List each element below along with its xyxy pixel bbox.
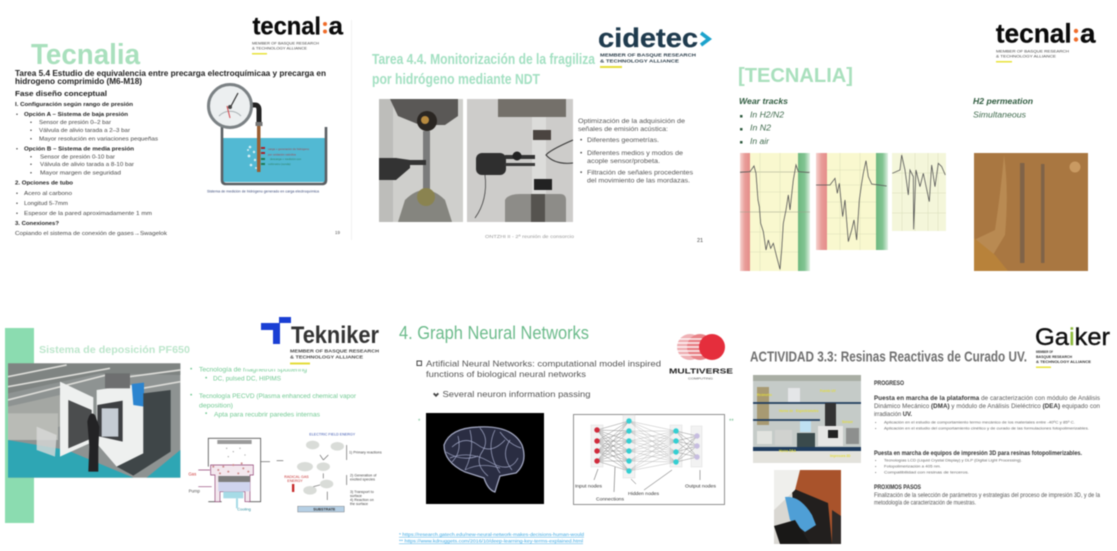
text block: wear tracks: Wear tracks [739, 97, 789, 106]
text block: wear tracks: In H2/N2 [750, 110, 785, 120]
footer: 21 [697, 238, 703, 244]
subheading: fase diseño conceptual: Fase diseño conceptual [15, 89, 107, 98]
text block: próximos pasos: metodología de caracterización de muestras. [874, 500, 976, 506]
logo: tecnalia: & TECHNOLOGY ALLIANCE [252, 46, 308, 50]
text block: optimización: Optimización de la adquisición de [578, 118, 685, 125]
diagram: neural network: Output nodes [685, 484, 716, 488]
text block: optimización: • [580, 137, 583, 144]
diagram: plasma reaction flow: 4) Reaction on [350, 498, 374, 502]
logo: tecnalia: a [328, 12, 344, 40]
text block: configuration list: • [30, 128, 32, 134]
text block: progreso: • [875, 426, 877, 430]
text block: configuration list: • [16, 112, 18, 118]
diagram: plasma reaction flow: 3) Transport to [350, 490, 374, 494]
chart: wear track H2/N2 [740, 153, 810, 271]
text block: configuration list: Válvula de alivio tarada a 8-10 bar [40, 162, 134, 168]
heading: tarea 4.4: por hidrógeno mediante NDT [372, 72, 540, 88]
text block: artificial neural networks: Artificial Neural Networks: computational model inspired [426, 358, 661, 368]
text block: artificial neural networks: functions of biological neural networks [426, 369, 586, 379]
text block: wear tracks: In N2 [750, 124, 772, 132]
text block: progreso: Puesta en marcha de la plataforma de caracterización con módulo de Análisis [874, 395, 1100, 402]
photo: gloved hand with 3D printer [774, 470, 841, 544]
references: links: ** https://www.kdnuggets.com/2016/10/deep-learning-key-terms-explained.html [399, 538, 583, 544]
diagram: PECVD chamber [188, 438, 283, 511]
text block: technologies: Tecnología PECVD (Plasma enhanced chemical vapor [199, 393, 357, 400]
photo: H2 permeation micrograph [974, 153, 1088, 271]
diagram: neural network: Input nodes [575, 484, 602, 488]
heading: tarea 5.4 [15, 68, 326, 86]
text block: configuration list: Opción A – Sistema de baja presión [24, 112, 129, 118]
text block: optimización: del movimiento de las mordazas. [587, 178, 690, 184]
text block: impresión 3D [874, 450, 1082, 474]
text block: optimización: Diferentes geometrías. [587, 137, 659, 144]
text block: impresión 3D: • [875, 470, 877, 474]
diagram: pressure gauge and electrochemical cell: descarga + medición con [270, 157, 302, 161]
diagram: PECVD chamber: Cooling [237, 506, 251, 511]
text block: configuration list [15, 102, 341, 237]
heading: graph neural networks: 4. Graph Neural Networks [399, 322, 589, 343]
text block: progreso [874, 380, 1101, 430]
panel: Tecnalia wear tracks [738, 18, 1096, 271]
logo: cidetec: & TECHNOLOGY ALLIANCE [600, 58, 679, 64]
text block: configuration list: • [16, 191, 18, 197]
logo: multiverse: MULTIVERSE [669, 366, 733, 376]
text block: H2 permeation: Simultaneous [973, 110, 1026, 120]
text block: configuration list: • [30, 170, 32, 176]
diagram: plasma reaction flow: ELECTRIC FIELD ENERGY [309, 432, 356, 436]
diagram: neural network: ** [729, 419, 734, 425]
diagram: pressure gauge and electrochemical cell: carga + generación de hidrógeno [268, 147, 310, 151]
heading: sistema de deposición: Sistema de deposición PF650 [39, 345, 190, 356]
photo: specimen left [379, 99, 463, 222]
photo: laboratory bench: Horno de [779, 409, 793, 413]
text block: progreso: irradiación UV. [874, 411, 912, 418]
text block: configuration list: • [30, 154, 32, 160]
diagram: plasma reaction flow: ENERGY [287, 479, 303, 483]
text block: wear tracks [739, 97, 789, 146]
logo: tecnalia: MEMBER OF BASQUE RESEARCH [252, 42, 320, 46]
text block: H2 permeation: H2 permeation [973, 97, 1033, 106]
text block: technologies [190, 366, 357, 418]
photo: laboratory bench: Horno DEA [779, 449, 797, 453]
photo: laboratory bench: Impresora 3D [830, 454, 851, 458]
text block: technologies: • [190, 366, 193, 373]
logo: tecnalia: MEMBER OF BASQUE RESEARCH [996, 50, 1070, 54]
photo: laboratory bench: Fuente UV [820, 389, 837, 393]
text block: impresión 3D: Puesta en marcha de equipos de impresión 3D para resinas fotopolimerizables. [874, 450, 1082, 457]
text block: optimización [578, 118, 694, 184]
logo: tekniker [200, 312, 384, 369]
logo: tekniker: MEMBER OF BASQUE RESEARCH [290, 348, 380, 354]
text block: impresión 3D: Compatibilidad con resinas de terceros. [884, 470, 969, 474]
heading: tarea 5.4: Tarea 5.4 Estudio de equivalencia entre precarga electroquímicaa y precarga en [15, 68, 326, 78]
text block: configuration list: • [16, 146, 18, 152]
diagram: plasma reaction flow [284, 432, 382, 512]
text block: H2 permeation [973, 97, 1033, 120]
chart: wear track air [892, 153, 946, 231]
text block: progreso: Dinámico Mecánico (DMA) y módulo de Análisis Dieléctrico (DEA) equipado con [874, 403, 1101, 410]
text block: technologies: Tecnología de magnetron sputtering [199, 366, 307, 374]
diagram: plasma reaction flow: 1) Primary reactions [349, 450, 382, 454]
text block: technologies: • [190, 392, 193, 399]
references: links [399, 532, 585, 544]
text block: optimización: Filtración de señales procedentes [587, 170, 694, 176]
text block: configuration list: Copiando el sistema de conexión de gases→Swagelok [15, 231, 167, 237]
text block: configuration list: Válvula de alivio tarada a 2–3 bar [39, 128, 130, 134]
text block: próximos pasos [874, 484, 1100, 506]
text block: configuration list: • [16, 211, 18, 217]
logo: tecnalia: & TECHNOLOGY ALLIANCE [996, 54, 1057, 58]
chart: wear track N2 [816, 153, 888, 250]
logo: cidetec: cidetec [598, 23, 698, 53]
diagram: plasma reaction flow: excited species [350, 478, 375, 482]
text block: configuration list: Opción B – Sistema de media presión [24, 146, 135, 152]
photo: laboratory bench [753, 375, 861, 463]
text block: optimización: Diferentes medios y modos de [587, 150, 683, 157]
heading: tarea 5.4: hidrogeno comprimido (M6-M18) [15, 76, 142, 86]
heading: Tecnalia: Tecnalia [31, 39, 141, 71]
heading: actividad 3.3: ACTIVIDAD 3.3: Resinas Reactivas de Curado UV. [750, 348, 1027, 366]
logo: multiverse [669, 334, 733, 380]
text block: configuration list: Mayor resolución en variaciones pequeñas [39, 136, 158, 142]
logo: tecnalia: tecnal [996, 18, 1072, 48]
text block: technologies: • [205, 375, 208, 382]
text block: impresión 3D: Tecnologías LCD (Liquid Crystal Display) y DLP (Digital Light Processing). [884, 458, 1022, 462]
diagram: plasma reaction flow: the surface [350, 502, 368, 506]
diagram: plasma reaction flow: surface [350, 494, 362, 498]
text block: artificial neural networks [417, 358, 661, 399]
text block: wear tracks: In air [750, 137, 769, 146]
text block: technologies: Apta para recubrir paredes internas [214, 412, 321, 418]
text block: próximos pasos: PROXIMOS PASOS [874, 484, 921, 491]
diagram: neural network: Connections [596, 496, 624, 502]
diagram: neural network [574, 414, 734, 504]
text block: progreso: Aplicación en el estudio del comportamiento cinético y de curado de las formulaciones fotopolimerizables. [884, 426, 1089, 430]
heading: tarea 4.4 [372, 52, 596, 88]
text block: configuration list: • [30, 162, 32, 168]
footer [485, 234, 703, 244]
diagram: pressure gauge and electrochemical cell: por oxidación catódica [268, 152, 296, 156]
text block: configuration list: Espesor de la pared aproximadamente 1 mm [24, 211, 152, 217]
text block: progreso: Aplicación en el estudio de comportamiento termo mecánico de los materiales entre -40ºC y 85º C. [884, 420, 1075, 424]
caption: Sistema de medición de hidrógeno generado en carga electroquímica [207, 190, 319, 194]
text block: technologies: DC, pulsed DC, HIPIMS [213, 376, 282, 382]
diagram: plasma reaction flow: SUBSTRATE [313, 508, 336, 512]
text block: technologies: deposition) [199, 402, 233, 410]
text block: configuration list: Mayor margen de seguridad [40, 170, 121, 176]
text block: configuration list: Longitud 5-7mm [24, 201, 68, 207]
text block: optimización: • [580, 170, 583, 176]
references: links: * https://research.gatech.edu/new-neural-network-makes-decisions-human-would [399, 532, 585, 537]
diagram: pressure gauge and electrochemical cell: voltímetro (sonda) [268, 162, 291, 166]
logo: tecnalia [996, 18, 1096, 62]
text block: configuration list: Sensor de presión 0-10 bar [40, 154, 115, 160]
photo: laboratory bench: Reómetro [757, 393, 772, 397]
photo: neural brain [418, 413, 544, 504]
photo: laboratory bench: Sensor [842, 420, 854, 424]
text block: progreso: PROGRESO [874, 380, 904, 387]
heading: [TECNALIA]: [TECNALIA] [738, 65, 853, 87]
panel: Cidetec tarea 4.4 [372, 23, 709, 244]
text block: configuration list: • [30, 136, 32, 142]
text block: configuration list: • [30, 120, 32, 126]
text block: progreso: • [875, 420, 877, 424]
logo: tecnalia: tecnal [252, 12, 321, 40]
panel: Multiverse graph neural networks [399, 322, 734, 544]
text block: configuration list: 2. Opciones de tubo [15, 180, 74, 186]
diagram: pressure gauge and electrochemical cell [207, 84, 326, 194]
logo: multiverse: COMPUTING [688, 376, 714, 380]
text block: configuration list: 3. Conexiones? [15, 221, 60, 227]
text block: artificial neural networks: Several neuron information passing [442, 389, 591, 399]
text block: configuration list: • [16, 201, 18, 207]
logo: gaiker [1035, 324, 1110, 368]
logo: gaiker: BASQUE RESEARCH [1036, 355, 1072, 359]
logo: tekniker: Tekniker [291, 322, 379, 349]
logo: cidetec [598, 23, 709, 68]
green side band [5, 328, 34, 523]
panel: Tecnalia tarea 5.4 [15, 12, 352, 240]
heading: tarea 4.4: Tarea 4.4. Monitorización de la fragiliza [372, 52, 596, 68]
text block: optimización: acople sensor/probeta. [587, 158, 660, 165]
text block: optimización: señales de emisión acústica: [578, 126, 668, 133]
text block: configuration list: Acero al carbono [24, 191, 72, 197]
text block: impresión 3D: • [875, 464, 877, 468]
logo: gaiker: & TECHNOLOGY ALLIANCE [1036, 360, 1092, 364]
diagram: neural network: Hidden nodes [628, 491, 659, 496]
text block: impresión 3D: • [875, 458, 877, 462]
logo: tecnalia: a [1080, 18, 1096, 48]
text block: impresión 3D: Fotopolimerización a 405 nm. [884, 464, 941, 468]
text block: configuration list: 19 [335, 230, 341, 235]
text block: technologies: • [205, 410, 208, 418]
photo: laboratory bench: Espectrómetro [796, 409, 819, 413]
diagram: PECVD chamber: Gas [188, 472, 196, 477]
text block: configuration list: Sensor de presión 0–2 bar [39, 120, 111, 126]
logo: gaiker: MEMBER OF [1036, 350, 1054, 354]
logo: tekniker: & TECHNOLOGY ALLIANCE [290, 354, 364, 360]
photo: neural brain: * [418, 419, 421, 425]
logo: cidetec: MEMBER OF BASQUE RESEARCH [600, 52, 697, 58]
diagram: plasma reaction flow: 2) Generation of [350, 474, 377, 478]
diagram: PECVD chamber: Pump [189, 489, 201, 494]
footer: ONTZHI II - 2ª reunión de consorcio [485, 234, 575, 239]
text block: configuration list: I. Configuración según rango de presión [15, 102, 134, 108]
photo: deposition machine [8, 363, 180, 478]
panel: Tekniker sistema de deposición [5, 312, 384, 523]
photo: specimen right [467, 99, 573, 222]
logo: gaiker: Gaiker [1035, 324, 1110, 351]
text block: optimización: • [580, 150, 583, 157]
logo: tecnalia [252, 12, 344, 54]
panel: Gaiker actividad 3.3 [750, 324, 1110, 544]
diagram: plasma reaction flow: RADICAL GAS [284, 475, 309, 479]
